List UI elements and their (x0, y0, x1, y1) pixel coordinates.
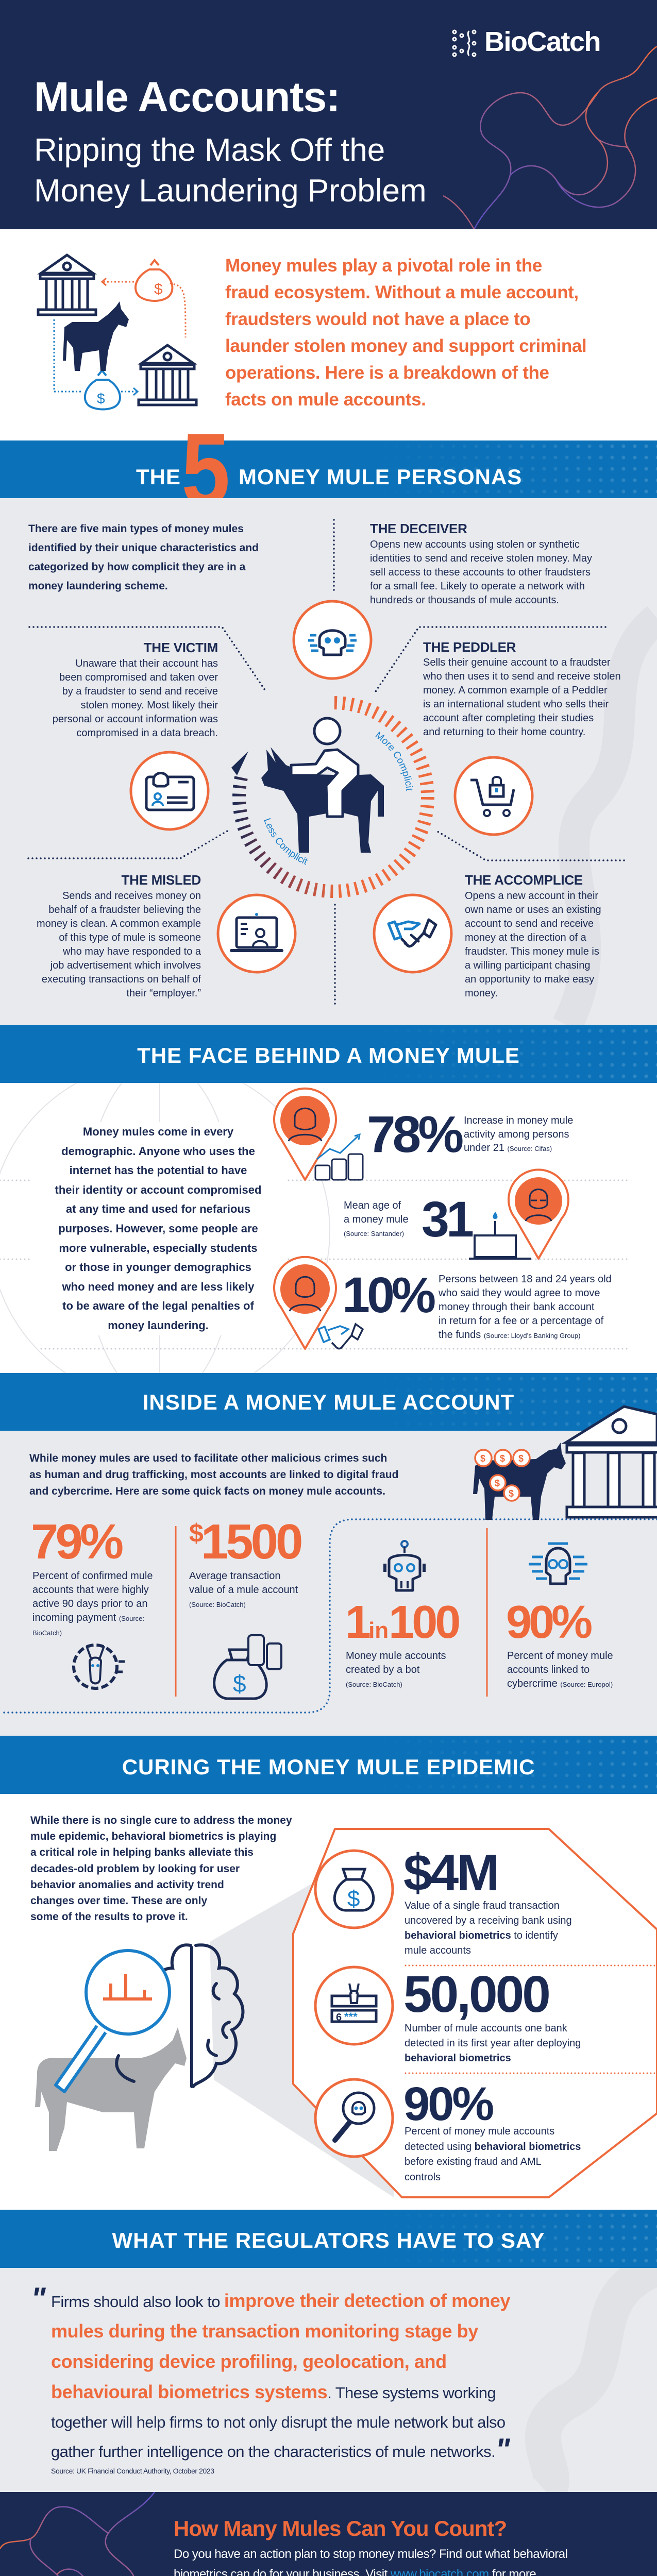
persona: the accomplice: an opportunity to make easy (465, 974, 594, 985)
panel: personas (0, 498, 657, 1025)
stat: $1500: $1500 (189, 1514, 300, 1569)
band: curing the money mule epidemic: CURING THE MONEY MULE EPIDEMIC (122, 1755, 535, 1779)
persona: the victim (53, 640, 218, 739)
persona: the accomplice (465, 872, 601, 999)
persona: the victim: stolen money. Most likely their (81, 700, 218, 711)
logo: BioCatch (484, 26, 600, 57)
text: money mules come in every demographic: more vulnerable, especially students (59, 1242, 258, 1255)
intro text: curing: While there is no single cure to address the money (30, 1815, 292, 1826)
icon: money bag circle (314, 1850, 394, 1929)
persona: the accomplice: fraudster. This money mule is (465, 946, 599, 957)
stat text: 79%: incoming payment (Source: (32, 1612, 144, 1623)
icon: money bag circle: $ (347, 1886, 360, 1911)
stat text: mean age: a money mule (344, 1214, 409, 1225)
band: inside a money mule account: INSIDE A MONEY MULE ACCOUNT (143, 1390, 514, 1414)
persona: the victim: been compromised and taken over (59, 672, 218, 683)
complicity arc: Less Complicit (264, 818, 308, 865)
persona: the deceiver: Opens new accounts using stolen or synthetic (370, 539, 580, 550)
icon: donkey carrying money bags to bank: $ (518, 1453, 524, 1464)
heading: how many mules: How Many Mules Can You Count? (174, 2516, 507, 2540)
header (0, 0, 657, 229)
panel: face behind a money mule (0, 1083, 657, 1373)
intro text: facts on mule accounts. (225, 389, 426, 410)
stat: 90%: 90% (506, 1597, 589, 1648)
persona: the misled (37, 872, 201, 999)
panel: regulator quote (0, 2268, 657, 2492)
intro text: fraud ecosystem. Without a mule account, (225, 282, 579, 302)
complicity arc (231, 696, 434, 898)
stat text: 90% detected: before existing fraud and AML (405, 2156, 542, 2167)
icon: misled laptop (216, 893, 297, 974)
intro text: personas: identified by their unique characteristics and (28, 542, 259, 554)
title: Ripping the Mask Off the (34, 132, 385, 168)
icon: cake and pin (469, 1168, 569, 1260)
stat text: 50,000: detected in its first year after deploying (405, 2038, 581, 2049)
text: money mules come in every demographic: to be aware of the legal penalties of (62, 1299, 254, 1312)
icon: login donkey circle (313, 1965, 395, 2046)
icon: victim id card (130, 751, 209, 831)
persona: the accomplice: money. (465, 988, 498, 999)
icon: donkey carrying money bags to bank: $ (480, 1453, 485, 1464)
persona: the deceiver: for a small fee. Likely to operate a network with (370, 581, 585, 592)
persona: the misled: their “employer.” (127, 988, 201, 999)
persona: the misled: executing transactions on behalf of (42, 974, 201, 985)
stat text: $1500: (Source: BioCatch) (189, 1601, 246, 1608)
stat text: 90% detected: Percent of money mule accounts (405, 2126, 554, 2137)
intro text: Money mules play a pivotal role in the (225, 256, 542, 276)
icon: robot (383, 1540, 426, 1592)
icon: skull (529, 1543, 587, 1585)
text: money mules come in every demographic: their identity or account compromised (55, 1183, 261, 1196)
title (34, 74, 427, 209)
stat text: 10%: Persons between 18 and 24 years old (439, 1274, 612, 1285)
persona: the misled: of this type of mule is someone (59, 932, 201, 943)
stat text: 78%: activity among persons (464, 1128, 569, 1140)
intro text: curing (30, 1815, 292, 1923)
quote text: Firms should also look to improve their detection of money (51, 2290, 510, 2311)
intro text: personas (28, 523, 259, 592)
intro text: personas: There are five main types of money mules (28, 523, 244, 535)
persona: the peddler: and returning to their home country. (423, 726, 585, 738)
panel: curing the epidemic (0, 1794, 657, 2210)
persona: the peddler: account after completing their studies (423, 713, 594, 724)
intro text: curing: mule epidemic, behavioral biometrics is playing (30, 1831, 276, 1842)
icon: money bag with coins: $ (233, 1670, 246, 1697)
persona: the peddler: is an international student who sells their (423, 699, 609, 710)
persona: the deceiver: identities to send and receive stolen money. May (370, 553, 592, 564)
decorative wavy lines (443, 46, 657, 229)
intro text: curing: some of the results to prove it. (30, 1911, 188, 1923)
stat text: 90%: cybercrime (Source: Europol) (507, 1678, 613, 1689)
stat: 50,000: 50,000 (403, 1965, 549, 2023)
intro text: inside: While money mules are used to facilitate other malicious crimes such (29, 1452, 387, 1464)
icon: login donkey circle: 6 (336, 2012, 342, 2023)
icon: accomplice handshake (373, 893, 452, 974)
icon: pin with handshake (273, 1256, 364, 1350)
stat text: 50,000: behavioral biometrics (405, 2053, 511, 2064)
text: money mules come in every demographic: money laundering. (108, 1319, 209, 1332)
persona: the peddler: Sells their genuine account to a fraudster (423, 657, 611, 668)
persona: the misled: money is clean. A common example (37, 918, 201, 929)
decorative globe (0, 1083, 628, 1373)
stat text: $1500: value of a mule account (189, 1584, 298, 1596)
stat text: $4M: mule accounts (405, 1945, 471, 1956)
quote text: mules during the transaction monitoring stage by (51, 2320, 478, 2342)
intro text: inside: and cybercrime. Here are some quick facts on money mule accounts. (29, 1485, 385, 1497)
call to action text: Do you have an action plan to stop money mules? Find out what behavioral (174, 2547, 567, 2561)
stat: 1 in 100: 1in100 (345, 1597, 458, 1648)
band: inside a money mule account (0, 1373, 657, 1431)
intro illustration: mule flow: $ (154, 281, 163, 298)
stat text: 78%: Increase in money mule (464, 1115, 573, 1126)
intro text: personas: categorized by how complicit they are in a (28, 561, 245, 573)
stat text: 79%: BioCatch) (32, 1629, 62, 1637)
icon: donkey carrying money bags to bank: $ (500, 1453, 505, 1464)
persona: the misled: THE MISLED (122, 872, 201, 888)
band: what the regulators have to say (0, 2210, 657, 2268)
persona: the peddler (423, 639, 621, 738)
quote text: together will help firms to not only disrupt the mule network but also (51, 2413, 506, 2431)
persona: the accomplice: THE ACCOMPLICE (465, 872, 583, 888)
intro text: operations. Here is a breakdown of the (225, 363, 549, 383)
intro text: curing: behavior anomalies and activity trend (30, 1879, 224, 1891)
stat text: 90% (507, 1650, 613, 1689)
stat text: $4M: Value of a single fraud transaction (405, 1900, 560, 1911)
text: money mules come in every demographic: or those in younger demographics (65, 1261, 251, 1274)
icon: money bag with coins (213, 1634, 282, 1700)
title: Mule Accounts: (34, 74, 340, 121)
text: money mules come in every demographic: demographic. Anyone who uses the (61, 1145, 255, 1158)
icon: peddler cart (453, 756, 534, 836)
illustration: magnifier, brain, donkey and octagon (35, 1828, 657, 2198)
stat text: mean age (344, 1200, 409, 1238)
intro text: curing: changes over time. These are only (30, 1895, 207, 1907)
stat: 10%: 10% (342, 1267, 433, 1323)
quote text: considering device profiling, geolocation, and (51, 2351, 447, 2372)
icon: logo dots (452, 30, 476, 57)
persona: the deceiver (370, 521, 592, 606)
decorative wavy lines (0, 2492, 165, 2576)
persona: the misled: who may have responded to a (63, 946, 201, 957)
stat text: 90% detected: detected using behavioral biometrics (405, 2141, 581, 2153)
persona: the misled: Sends and receives money on (62, 890, 201, 902)
intro illustration: mule flow: $ (97, 391, 105, 406)
stat text: 10%: money through their bank account (439, 1301, 594, 1313)
persona: the victim: by a fraudster to send and receive (62, 686, 218, 697)
icon: donkey carrying money bags to bank: $ (495, 1478, 500, 1488)
icon: donkey carrying money bags to bank: $ (509, 1488, 514, 1499)
text: money mules come in every demographic (31, 1122, 285, 1335)
text: money mules come in every demographic: Money mules come in every (83, 1125, 233, 1138)
persona: the peddler: money. A common example of a Peddler (423, 685, 608, 696)
persona: the accomplice: account to send and receive (465, 918, 594, 929)
icon: gear donkey (72, 1643, 125, 1690)
text: money mules come in every demographic: who need money and are less likely (62, 1280, 254, 1293)
band: the 5 money mule personas: MONEY MULE PERSONAS (239, 465, 522, 489)
band: curing the money mule epidemic (0, 1736, 657, 1794)
persona: the accomplice: Opens a new account in their (465, 890, 598, 902)
intro text: curing: decades-old problem by looking for user (30, 1863, 240, 1875)
stat: $4M: $4M (403, 1844, 498, 1902)
stat text: mean age: Mean age of (344, 1200, 401, 1211)
band: the 5 money mule personas: THE (136, 465, 181, 489)
footer (0, 2492, 657, 2576)
intro text: curing: a critical role in helping banks alleviate this (30, 1846, 254, 1858)
stat text: 10%: in return for a fee or a percentage of (439, 1315, 603, 1327)
stat text: 90%: Percent of money mule (507, 1650, 613, 1662)
icon: pin with coins (273, 1087, 364, 1181)
quote text: behavioural biometrics systems. These systems working (51, 2381, 496, 2402)
persona: the victim: personal or account information was (53, 714, 218, 725)
intro text: launder stolen money and support criminal (225, 336, 586, 356)
intro illustration: mule flow (37, 253, 198, 410)
stat text: $1500 (189, 1570, 298, 1608)
persona: the peddler: THE PEDDLER (423, 639, 516, 655)
stat text: $4M: behavioral biometrics to identify (405, 1930, 558, 1941)
stat text: 90% detected (405, 2124, 581, 2185)
icon: rider on donkey (261, 717, 384, 853)
band: the face behind a money mule: THE FACE BEHIND A MONEY MULE (137, 1043, 520, 1067)
stat text: 90%: accounts linked to (507, 1664, 589, 1675)
persona: the victim: THE VICTIM (144, 640, 218, 655)
persona: the peddler: who then uses it to send and receive stolen (423, 671, 621, 682)
stat text: 78% (464, 1115, 573, 1154)
persona: the accomplice: money at the direction of a (465, 932, 586, 943)
call to action text (174, 2544, 637, 2576)
stat: 79%: 79% (31, 1514, 121, 1569)
stat text: 1 in 100: (Source: BioCatch) (346, 1681, 402, 1688)
stat text: 1 in 100: Money mule accounts (346, 1650, 446, 1662)
persona: the misled: job advertisement which involves (50, 960, 201, 971)
stat text: 50,000 (405, 2021, 581, 2066)
panel: inside a money mule account (0, 1431, 657, 1736)
stat text: $1500: Average transaction (189, 1570, 281, 1582)
stat text: $4M (405, 1899, 572, 1958)
band: the 5 money mule personas (0, 440, 657, 498)
persona: the victim: compromised in a data breach. (76, 727, 218, 739)
stat text: 79% (32, 1570, 153, 1637)
source: Source: UK Financial Conduct Authority, October 2023 (51, 2467, 214, 2475)
quote text (51, 2286, 644, 2466)
stat text: 79%: Percent of confirmed mule (32, 1570, 153, 1582)
persona: the victim: Unaware that their account has (75, 658, 218, 669)
stat text: 79%: active 90 days prior to an (32, 1598, 147, 1609)
intro text (225, 256, 586, 410)
text: money mules come in every demographic: purposes. However, some people are (58, 1222, 258, 1235)
stat text: 1 in 100: created by a bot (346, 1664, 419, 1675)
persona: the accomplice: a willing participant chasing (465, 960, 590, 971)
band: the face behind a money mule (0, 1025, 657, 1083)
stat text: 1 in 100 (346, 1650, 446, 1688)
stat text: 78%: under 21 (Source: Cifas) (464, 1142, 552, 1154)
persona: the deceiver: hundreds or thousands of mule accounts. (370, 595, 559, 606)
stat: 78%: 78% (367, 1106, 461, 1163)
stat text: mean age: (Source: Santander) (344, 1230, 404, 1238)
text: money mules come in every demographic: internet has the potential to have (70, 1164, 247, 1177)
stat text: 10%: the funds (Source: Lloyd’s Banking Group) (439, 1329, 580, 1341)
text: money mules come in every demographic: at any time and used for nefarious (66, 1202, 250, 1215)
intro text: inside: as human and drug trafficking, most accounts are linked to digital fraud (29, 1469, 398, 1481)
stat: 90% detected: 90% (403, 2078, 492, 2130)
persona: the accomplice: own name or uses an existing (465, 904, 601, 916)
band: what the regulators have to say: WHAT THE REGULATORS HAVE TO SAY (112, 2228, 545, 2252)
persona: the deceiver: sell access to these accounts to other fraudsters (370, 567, 591, 578)
stat text: 10%: who said they would agree to move (439, 1287, 600, 1299)
stat text: 79%: accounts that were highly (32, 1584, 149, 1596)
persona: the misled: behalf of a fraudster believing the (48, 904, 201, 916)
intro text: inside (29, 1452, 398, 1497)
big number 5: 5 (181, 412, 230, 527)
intro text: personas: money laundering scheme. (28, 580, 168, 592)
icon: deceiver skull (293, 600, 372, 680)
intro text: fraudsters would not have a place to (225, 309, 530, 329)
stat text: 90% detected: controls (405, 2171, 441, 2182)
quote mark open: " (31, 2281, 45, 2316)
icon: login donkey circle: *** (344, 2010, 358, 2023)
stat: 31: 31 (422, 1191, 471, 1247)
icon: skull magnifier circle (313, 2077, 395, 2159)
icon: donkey carrying money bags to bank (473, 1405, 657, 1520)
stat text: $4M: uncovered by a receiving bank using (405, 1915, 572, 1926)
complicity arc: More Complicit (375, 732, 413, 791)
stat text: 50,000: Number of mule accounts one bank (405, 2023, 567, 2034)
quote text: gather further intelligence on the characteristics of mule networks." (51, 2432, 510, 2466)
persona: the deceiver: THE DECEIVER (370, 521, 467, 536)
stat text: 10% (439, 1274, 612, 1341)
title: Money Laundering Problem (34, 173, 427, 209)
